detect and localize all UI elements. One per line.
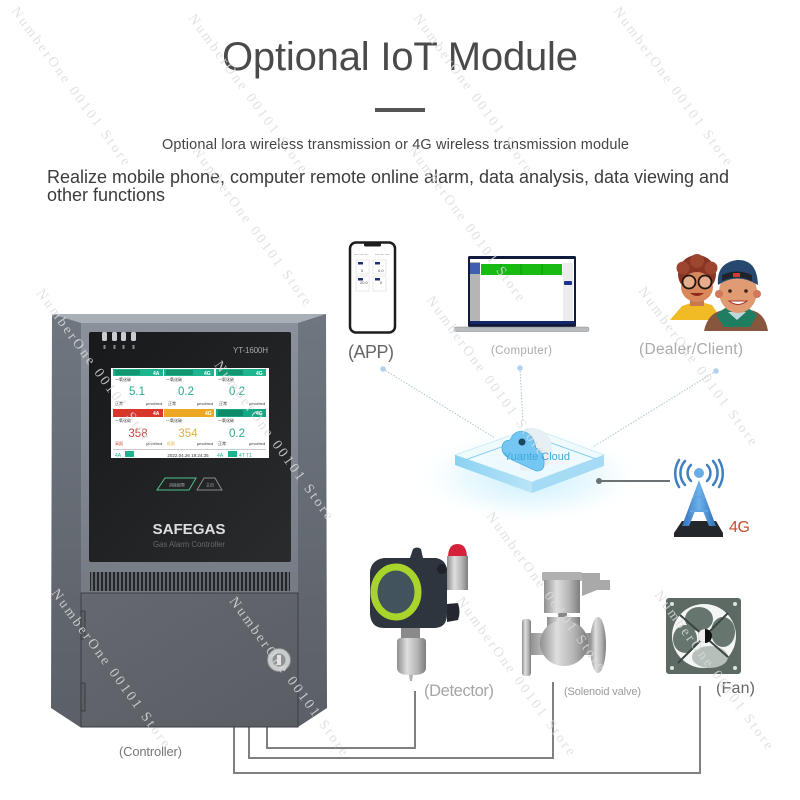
store watermarks: NumberOne 00101 Store: [211, 359, 336, 523]
alarm lamp: [447, 544, 468, 590]
wiring from controller to field devices: [234, 682, 700, 773]
touch screen: 4G: [256, 371, 263, 377]
touch screen: μmol/mol: [146, 441, 162, 446]
touch screen: 一氧化碳: [166, 417, 182, 423]
store watermarks: NumberOne 00101 Store: [33, 287, 158, 451]
icon: dealer and client characters: [670, 254, 768, 331]
status LEDs: [102, 332, 136, 349]
controller cabinet body: [51, 314, 327, 727]
touch screen: 5.1: [129, 386, 145, 398]
store watermarks: NumberOne 00101 Store: [483, 510, 608, 674]
touch screen: 0.2: [229, 386, 245, 398]
touch screen: 正常: [219, 400, 227, 406]
icon: mobile phone: 20.0: [360, 280, 369, 285]
label: solenoid valve: (Solenoid valve): [564, 686, 641, 698]
touch screen: 4G: [204, 371, 211, 377]
label: 4G: 4G: [729, 519, 750, 536]
store watermarks: NumberOne 00101 Store: [8, 5, 133, 169]
image: solenoid valve: [522, 572, 610, 676]
touch screen: 正常: [168, 400, 176, 406]
touch screen: 4A: [115, 453, 122, 459]
touch screen: 正常: [115, 400, 123, 406]
cabinet door: [81, 593, 298, 727]
title: Optional IoT Module: [222, 35, 578, 79]
platform glow: [412, 426, 648, 526]
door hinges: [81, 611, 85, 711]
glass platform: [455, 428, 604, 493]
touch screen: 4G: [256, 411, 263, 417]
touch screen: 一氧化碳: [218, 376, 234, 382]
gas alarm controller: [51, 314, 327, 727]
touch screen: 4A: [153, 411, 160, 417]
ventilation grille: [81, 571, 298, 593]
touch screen: 2022.04.26 19:24:35: [167, 453, 209, 458]
touch screen: μmol/mol: [146, 401, 162, 406]
touch screen: 一氧化碳: [218, 417, 234, 423]
dotted connection lines to the cloud: [380, 365, 719, 447]
store watermarks: NumberOne 00101 Store: [423, 294, 548, 458]
icon: 4G signal tower: [674, 460, 723, 537]
title underline: [375, 108, 425, 112]
detector housing: [370, 548, 447, 628]
touch screen: 4G: [205, 411, 212, 417]
touch screen: 低报: [167, 440, 175, 446]
label: fan: (Fan): [716, 680, 755, 697]
icon: mobile phone: 0.0: [378, 268, 384, 273]
right character: [704, 260, 768, 331]
description text: [47, 167, 729, 205]
display panel: [89, 332, 291, 562]
touch screen: 正常: [218, 440, 226, 446]
touch screen: μmol/mol: [249, 441, 265, 446]
store watermarks: NumberOne 00101 Store: [189, 145, 314, 309]
touch screen: 354: [178, 428, 198, 440]
icon: mobile phone: — — —: [354, 251, 368, 256]
touch screen: μmol/mol: [197, 441, 213, 446]
icon: mobile phone: 0: [361, 268, 364, 273]
touch screen: 0.2: [178, 386, 194, 398]
store watermarks: NumberOne 00101 Store: [410, 12, 535, 176]
touch screen: 4T T1: [239, 453, 252, 459]
front panel buttons: 消除报警: [169, 482, 185, 488]
store watermarks: NumberOne 00101 Store: [405, 144, 527, 304]
door lock: [268, 648, 290, 672]
left character: [670, 254, 722, 320]
probe sensor: [397, 626, 426, 681]
touch screen: μmol/mol: [249, 401, 265, 406]
touch screen: 一氧化碳: [166, 376, 182, 382]
icon: mobile phone: — — —: [375, 251, 389, 256]
description text: other functions: [47, 185, 165, 205]
model number: YT-1600H: [233, 346, 268, 355]
subtitle: Optional lora wireless transmission or 4G wireless transmission module: [162, 137, 629, 153]
connector: cloud to 4G tower: [596, 478, 670, 484]
product name: Gas Alarm Controller: [153, 540, 225, 549]
store watermarks: NumberOne 00101 Store: [185, 12, 310, 176]
store watermarks: NumberOne 00101 Store: [453, 595, 578, 759]
label: dealer and client: (Dealer/Client): [639, 341, 743, 358]
label: controller: (Controller): [119, 744, 182, 759]
fan blades: [673, 607, 735, 668]
store watermarks: NumberOne 00101 Store: [635, 285, 760, 449]
label: app: (APP): [348, 342, 394, 362]
store watermarks: NumberOne 00101 Store: [226, 595, 351, 759]
label: detector: (Detector): [424, 682, 494, 700]
icon: mobile phone: 0: [380, 280, 383, 285]
image: exhaust fan: [666, 598, 741, 674]
green display ring: [374, 567, 418, 617]
touch screen: 0.2: [229, 428, 245, 440]
store watermarks: NumberOne 00101 Store: [48, 587, 173, 751]
cloud platform: [412, 426, 648, 526]
brand name: SAFEGAS: [152, 521, 226, 538]
front panel buttons: 主页: [206, 482, 214, 488]
image: gas detector: [370, 544, 468, 681]
touch screen: 一氧化碳: [115, 376, 131, 382]
cloud icon: [502, 428, 552, 471]
store watermarks: NumberOne 00101 Store: [610, 5, 735, 169]
touch screen: 一氧化碳: [115, 417, 131, 423]
front panel buttons: [157, 478, 222, 490]
icon: mobile phone: [350, 242, 395, 332]
touch screen: 358: [128, 428, 148, 440]
store watermarks: NumberOne 00101 Store: [651, 589, 776, 753]
description text: Realize mobile phone, computer remote online alarm, data analysis, data viewing and: [47, 167, 729, 187]
touch screen: μmol/mol: [197, 401, 213, 406]
touch screen: [111, 368, 269, 459]
touch screen: 4A: [153, 371, 160, 377]
cloud label: Yuante Cloud: [504, 451, 570, 463]
icon: laptop computer: [454, 256, 589, 332]
label: computer: (Computer): [491, 345, 552, 357]
touch screen: 高报: [115, 440, 123, 446]
touch screen: 4A: [217, 453, 224, 459]
